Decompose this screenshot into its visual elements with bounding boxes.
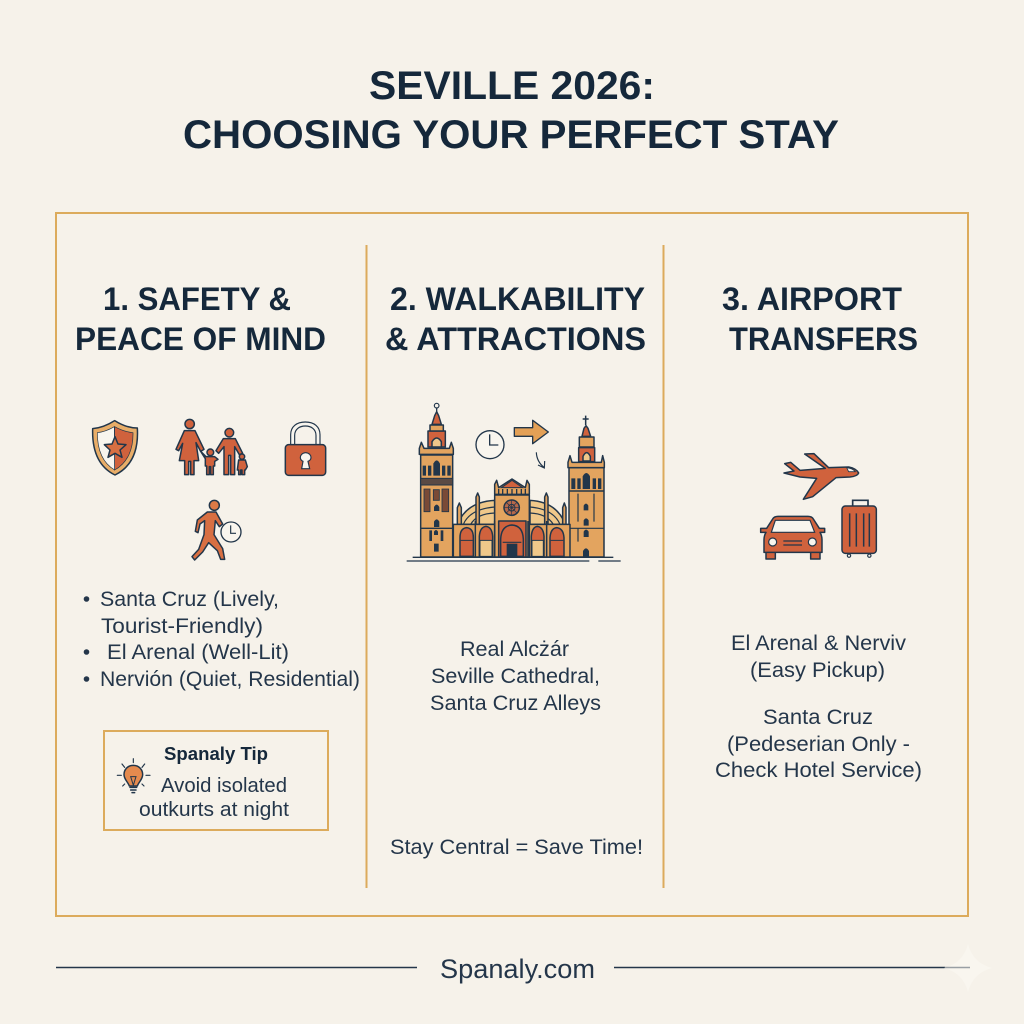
icon: small curved arrow [536,452,545,468]
text: attractions: Real Alcżár [460,637,569,661]
list: safe neighbourhoods: El Arenal (Well-Lit) [107,640,289,664]
list: safe neighbourhoods: Santa Cruz (Lively, [100,587,279,611]
list: safe neighbourhoods: Tourist-Friendly) [101,614,263,638]
ground lines [407,557,621,561]
icon: Seville cathedral with towers, clock and arrow [407,403,621,561]
text: stay central: Stay Central = Save Time! [390,835,643,859]
text: airport pickup: Check Hotel Service) [715,758,922,782]
icon: light bulb [117,759,150,793]
icon: padlock [285,422,326,475]
text: airport pickup: El Arenal & Nerviv [731,631,906,655]
heading: airport [722,281,918,357]
heading: walkability: 2. WALKABILITY [390,281,645,317]
text: attractions: Santa Cruz Alleys [430,691,601,715]
icon: clock [476,431,504,459]
left tower [419,403,453,557]
heading: safety: 1. SAFETY & [103,281,291,317]
heading: airport: TRANSFERS [729,321,918,357]
text: airport pickup: (Easy Pickup) [750,658,885,682]
main panel frame [56,213,968,916]
list: safe neighbourhoods: Nervión (Quiet, Residential) [100,667,360,691]
text: attractions [430,637,601,715]
callout: Spanaly tip: Spanaly Tip [164,744,268,764]
heading: safety: PEACE OF MIND [75,321,326,357]
callout: Spanaly tip: Avoid isolated [161,774,287,797]
icon: shield [93,421,137,475]
title: CHOOSING YOUR PERFECT STAY [183,113,839,157]
icon: suitcase [842,500,876,557]
text: attractions: Seville Cathedral, [431,664,600,688]
cathedral nave [453,479,570,557]
text: airport pickup [715,631,922,782]
heading: airport: 3. AIRPORT [722,281,902,317]
icon: car [761,516,825,559]
callout: Spanaly tip: outkurts at night [139,798,289,821]
decorative sparkle [944,944,992,992]
right tower [568,416,604,557]
heading: walkability [385,281,646,357]
text: airport pickup: (Pedeserian Only - [727,732,910,756]
title: SEVILLE 2026: [369,64,655,108]
title [183,64,839,157]
icon: arrow [514,420,548,444]
icon: airplane [784,454,859,499]
callout: Spanaly tip [104,731,328,830]
list: safe neighbourhoods [84,587,360,691]
heading: walkability: & ATTRACTIONS [385,321,646,357]
icon: family [176,419,247,475]
heading: safety [75,281,326,357]
footer: Spanaly.com [440,954,595,984]
text: airport pickup: Santa Cruz [763,705,873,729]
icon: walker with clock [192,500,241,560]
